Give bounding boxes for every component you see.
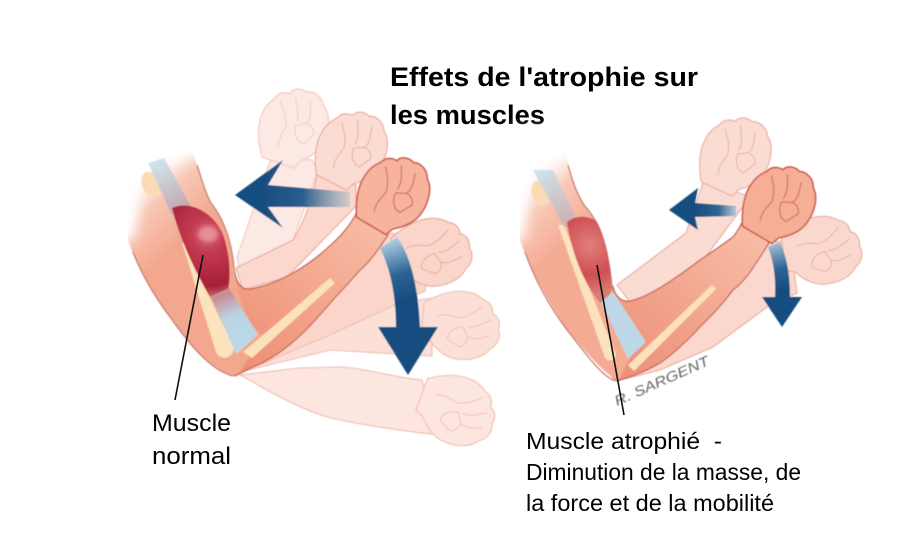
main fist [346,145,440,245]
muscle atrophied [567,217,612,303]
main upper arm [520,153,634,381]
title: les muscles [390,100,545,130]
arrow: flexion left [235,160,350,228]
humerus bone [528,178,616,360]
leader line: atrophied muscle [597,265,624,415]
faint lowered arms and fists [240,209,502,452]
main fist [732,154,826,254]
faint raised arm and fist [617,108,780,302]
forearm bone [243,278,335,358]
muscle highlight [198,226,218,242]
label: atrophied muscle: la force et de la mobilité [526,490,774,516]
main forearm [603,208,769,381]
muscle normal [172,205,230,299]
upper arm outline [525,165,615,381]
top fade [115,130,205,240]
illustration: normal arm [115,82,502,452]
upper tendon [533,170,578,228]
leader line: normal muscle [175,255,203,400]
upper tendon [148,158,192,215]
label: normal muscle: normal [152,443,231,470]
forearm bone [628,285,716,371]
main upper arm [128,150,262,376]
humerus bone [137,168,234,358]
label: atrophied muscle: Diminution de la masse, de [526,459,801,485]
arrow: flexion left [669,188,736,230]
arrow: extension down [762,242,802,327]
main forearm [222,212,388,376]
label: normal muscle: Muscle [152,410,231,437]
faint raised arms and fists [236,82,397,290]
title: Effets de l'atrophie sur [390,62,699,92]
label: normal muscle [152,410,231,470]
faint lowered arm and fist [620,207,868,380]
arrow: extension down [378,237,438,375]
illustration: atrophied arm [505,108,868,409]
lower tendon [211,288,258,354]
upper arm outline [133,165,234,376]
label: atrophied muscle [526,428,801,516]
signature: R. SARGENT [612,352,713,409]
top fade [505,130,578,240]
label: atrophied muscle: Muscle atrophié - [526,428,722,454]
lower tendon [601,292,646,359]
title [390,62,699,130]
